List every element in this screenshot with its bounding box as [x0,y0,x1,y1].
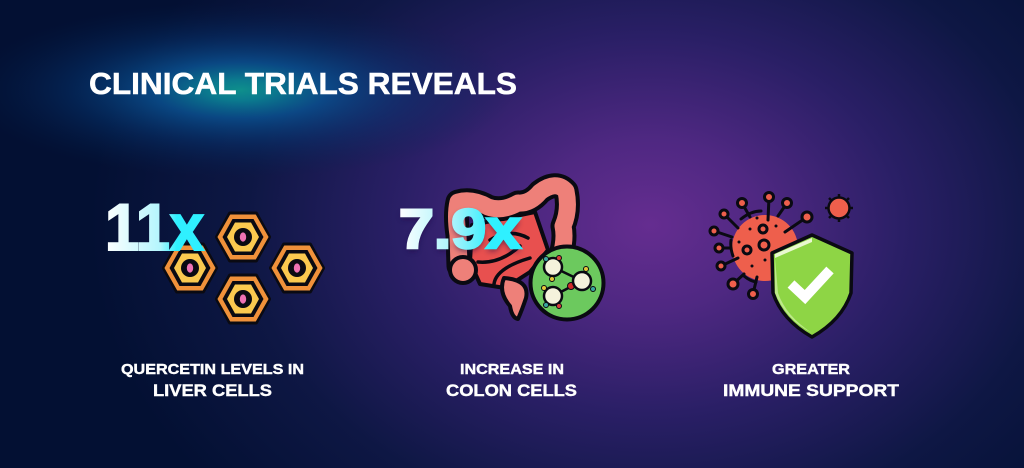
label: increase in colon cells [446,362,577,400]
large intestine outline [456,186,567,266]
icon: intestine with molecule [450,186,604,320]
label: increase in colon cells: INCREASE IN [460,362,564,378]
molecule badge [530,246,604,320]
number shadow: 7.9x [399,200,521,263]
caecum [450,257,476,283]
stat column: liver cells [105,190,323,400]
rectum [502,278,527,319]
label: quercetin levels in liver cells: QUERCETIN LEVELS IN [121,362,304,378]
number: 7.9x: 7.9x [399,197,521,260]
large intestine fill [456,186,567,266]
label: quercetin levels in liver cells: LIVER CELLS [153,382,272,400]
number: 11x: 11x [105,190,204,264]
label: quercetin levels in liver cells [121,362,304,400]
stat column: colon cells [399,186,604,400]
label: increase in colon cells: COLON CELLS [446,382,577,400]
stat column: immune support [710,192,899,400]
label: greater immune support: IMMUNE SUPPORT [723,382,899,400]
label: greater immune support [723,362,899,400]
icon: small virus [825,194,853,222]
icon: virus [710,192,812,298]
icon: shield with check [772,235,852,337]
icon: liver cell hexagons [164,214,323,322]
title: CLINICAL TRIALS REVEALS [89,66,517,101]
small intestine [470,212,548,288]
label: greater immune support: GREATER [772,362,851,378]
